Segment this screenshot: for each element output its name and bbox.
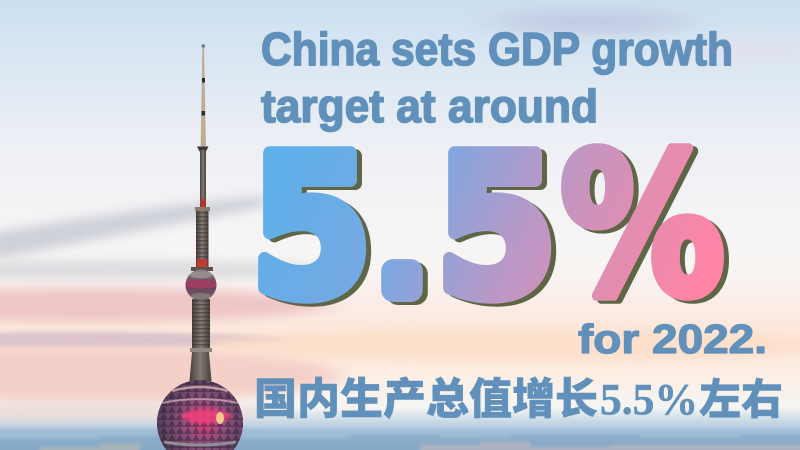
text: Chinese subtitle: 左右 xyxy=(699,376,783,423)
text: for 2022.: for 2022. xyxy=(578,316,767,362)
tower upper shaft xyxy=(191,146,213,271)
tower antenna xyxy=(201,44,206,147)
number fill: 5 xyxy=(436,115,557,340)
number fill: 5 xyxy=(251,115,372,340)
tower small sphere xyxy=(186,270,216,300)
tower lower shaft xyxy=(190,299,212,381)
text: Chinese subtitle xyxy=(254,375,783,424)
number shadow xyxy=(256,115,730,343)
heading: China sets GDP growth target at around xyxy=(261,23,733,132)
text: Chinese subtitle: 国内生产总值增长 xyxy=(254,376,598,424)
heading: China sets GDP growth target at around: China sets GDP growth xyxy=(261,23,733,75)
number shadow: 5 xyxy=(256,118,377,343)
number shadow: . xyxy=(388,200,426,317)
heading: China sets GDP growth target at around: target at around xyxy=(261,80,598,132)
icon: Oriental Pearl Tower xyxy=(157,44,243,450)
city skyline haze xyxy=(0,428,800,450)
number fill: . xyxy=(383,197,421,314)
big number: 5.5% xyxy=(251,112,730,343)
number shadow: 5 xyxy=(441,118,562,343)
number fill: % xyxy=(560,112,725,339)
number shadow: % xyxy=(565,115,730,342)
tower large sphere xyxy=(157,380,243,450)
text: Chinese subtitle: 5.5% xyxy=(600,375,698,424)
number fill xyxy=(251,112,725,340)
